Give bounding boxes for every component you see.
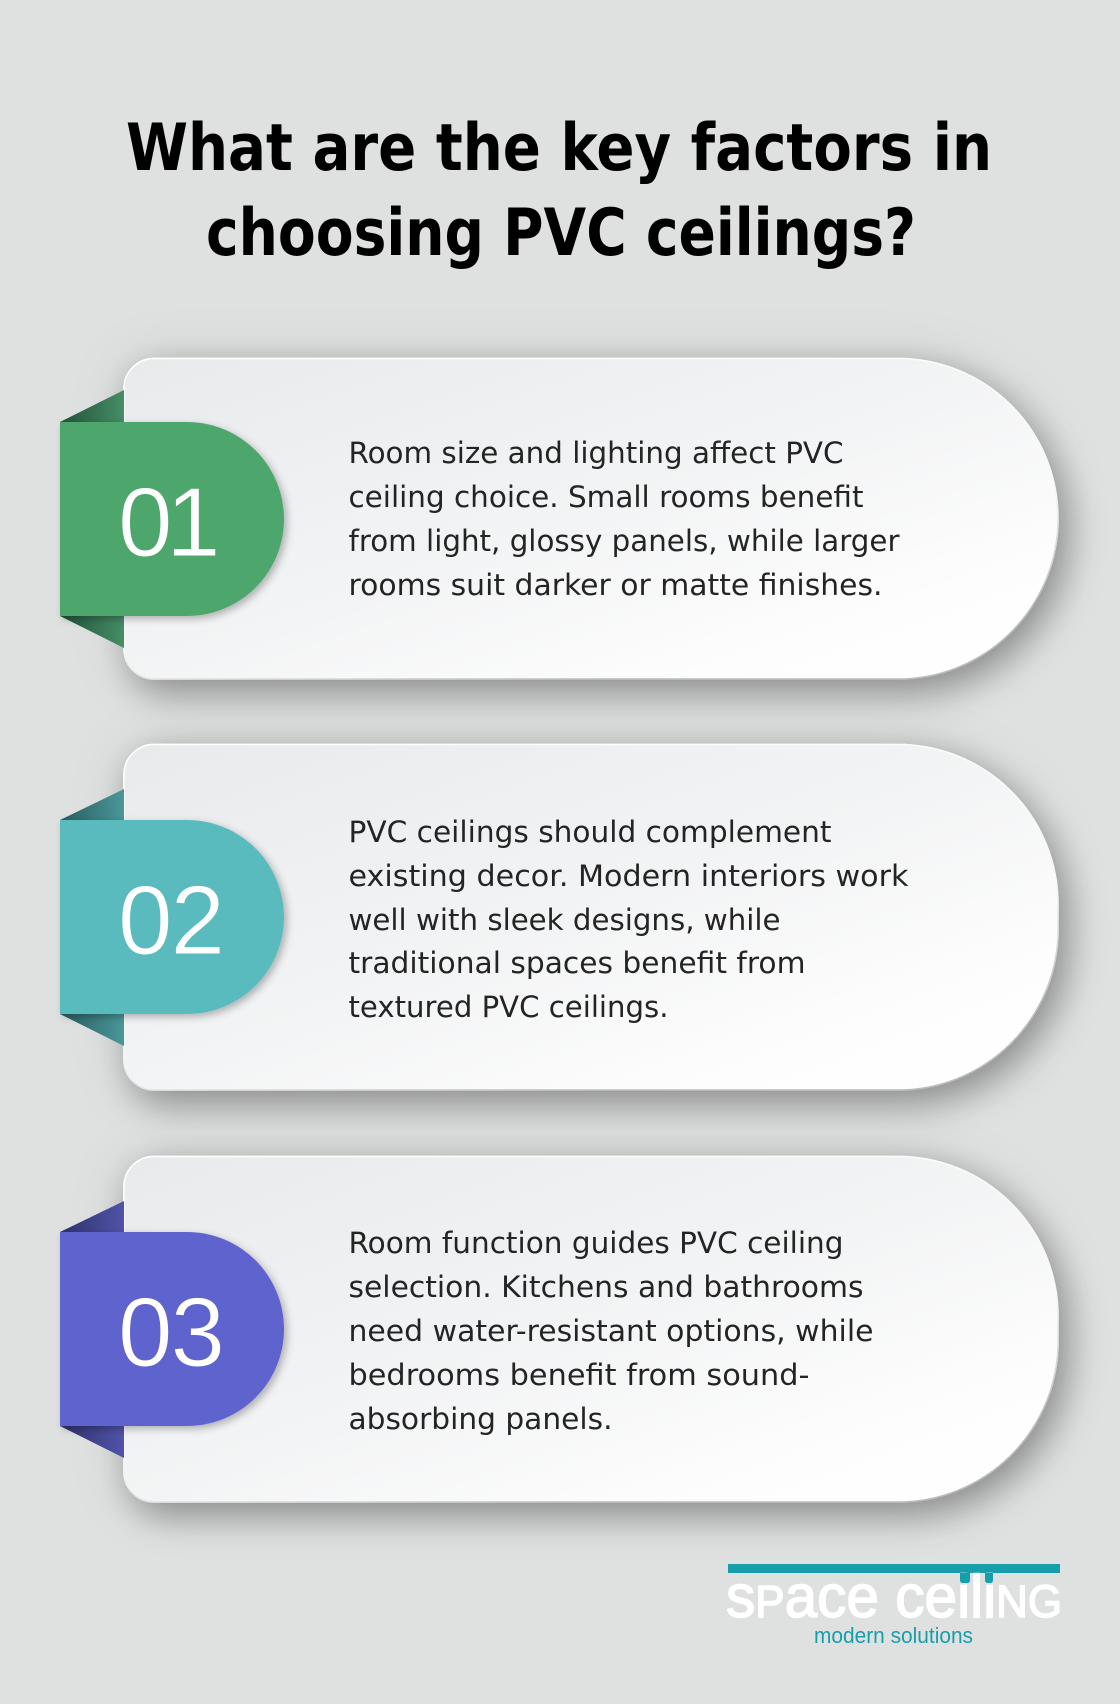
text: factor 1: rooms suit darker or matte finishes. [348,568,882,602]
text: factor 2: textured PVC ceilings. [348,990,668,1024]
text: factor 1 [348,436,900,602]
panel: factor 3 [60,1156,1058,1502]
number badge 1: 01 [118,467,221,577]
text: factor 3: bedrooms benefit from sound- [348,1358,810,1392]
logo: space ceiling: sPace ceiliNG [726,1563,1062,1630]
text: factor 3: Room function guides PVC ceiling [348,1226,844,1260]
title: What are the key factors in [126,111,992,186]
number badge 2: 02 [118,865,225,975]
number badge 1 [60,422,284,616]
text: factor 2: existing decor. Modern interiors work [348,859,908,893]
title [126,111,992,271]
logo: space ceiling: modern solutions [814,1623,973,1648]
text: factor 2 [348,815,908,1024]
panel: factor 1 [60,358,1058,679]
text: factor 2: PVC ceilings should complement [348,815,832,849]
ribbon folds 3 [60,1201,124,1458]
text: factor 3: absorbing panels. [348,1402,612,1436]
panel: factor 2 [60,744,1058,1090]
text: factor 1: from light, glossy panels, while larger [348,524,900,558]
card 1 [124,358,1058,679]
card 2 [124,744,1058,1090]
number badge 2 [60,820,284,1014]
number badge 3 [60,1232,284,1426]
card 3 [124,1156,1058,1502]
text: factor 2: well with sleek designs, while [348,903,780,937]
text: factor 2: traditional spaces benefit from [348,946,806,980]
text: factor 3 [348,1226,874,1436]
text: factor 3: selection. Kitchens and bathrooms [348,1270,864,1304]
ribbon folds 2 [60,789,124,1046]
ribbon folds 1 [60,390,124,648]
number badge 3: 03 [118,1277,225,1387]
text: factor 1: ceiling choice. Small rooms benefit [348,480,864,514]
text: factor 1: Room size and lighting affect PVC [348,436,844,470]
text: factor 3: need water-resistant options, while [348,1314,874,1348]
title: choosing PVC ceilings? [206,196,916,271]
